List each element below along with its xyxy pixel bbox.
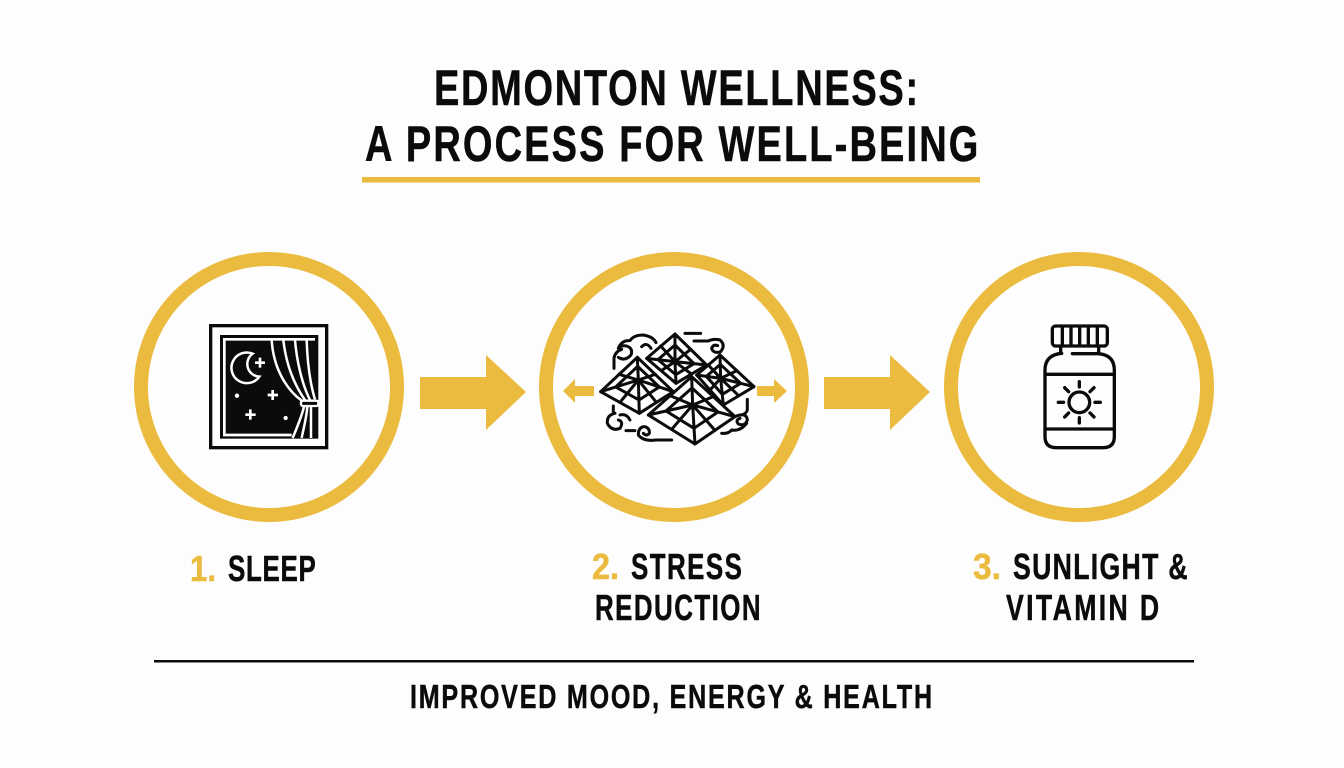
label 3: sunlight and vitamin D: VITAMIN D <box>1006 587 1159 628</box>
title: A PROCESS FOR WELL-BEING <box>365 117 978 172</box>
step 3 circle <box>951 259 1207 515</box>
label 2: stress reduction: 2. <box>592 546 619 587</box>
title: EDMONTON WELLNESS: <box>434 61 918 116</box>
small arrow left <box>563 379 594 403</box>
label 1: sleep: 1. <box>190 548 216 589</box>
label 3: sunlight and vitamin D <box>973 546 1188 628</box>
step 1 circle <box>141 259 397 515</box>
icon: vitamin D bottle with sun <box>1045 326 1114 448</box>
step 2 circle <box>546 259 802 515</box>
outcome text: IMPROVED MOOD, ENERGY & HEALTH <box>410 679 932 716</box>
icon: night window with curtain <box>211 326 327 448</box>
label 2: stress reduction: REDUCTION <box>595 588 761 628</box>
title underline <box>362 177 980 182</box>
bottom divider <box>154 660 1194 662</box>
arrow 2 <box>824 355 930 430</box>
arrow 1 <box>420 355 526 430</box>
label 1: sleep: SLEEP <box>228 549 316 589</box>
icon: pyramids and swirls <box>601 333 754 444</box>
title <box>365 61 978 172</box>
label 3: sunlight and vitamin D: SUNLIGHT & <box>1013 546 1188 587</box>
label 3: sunlight and vitamin D: 3. <box>973 546 1001 587</box>
label 2: stress reduction: STRESS <box>631 547 742 587</box>
label 2: stress reduction <box>592 546 761 628</box>
label 1: sleep <box>190 548 316 589</box>
small arrow right <box>757 379 787 403</box>
